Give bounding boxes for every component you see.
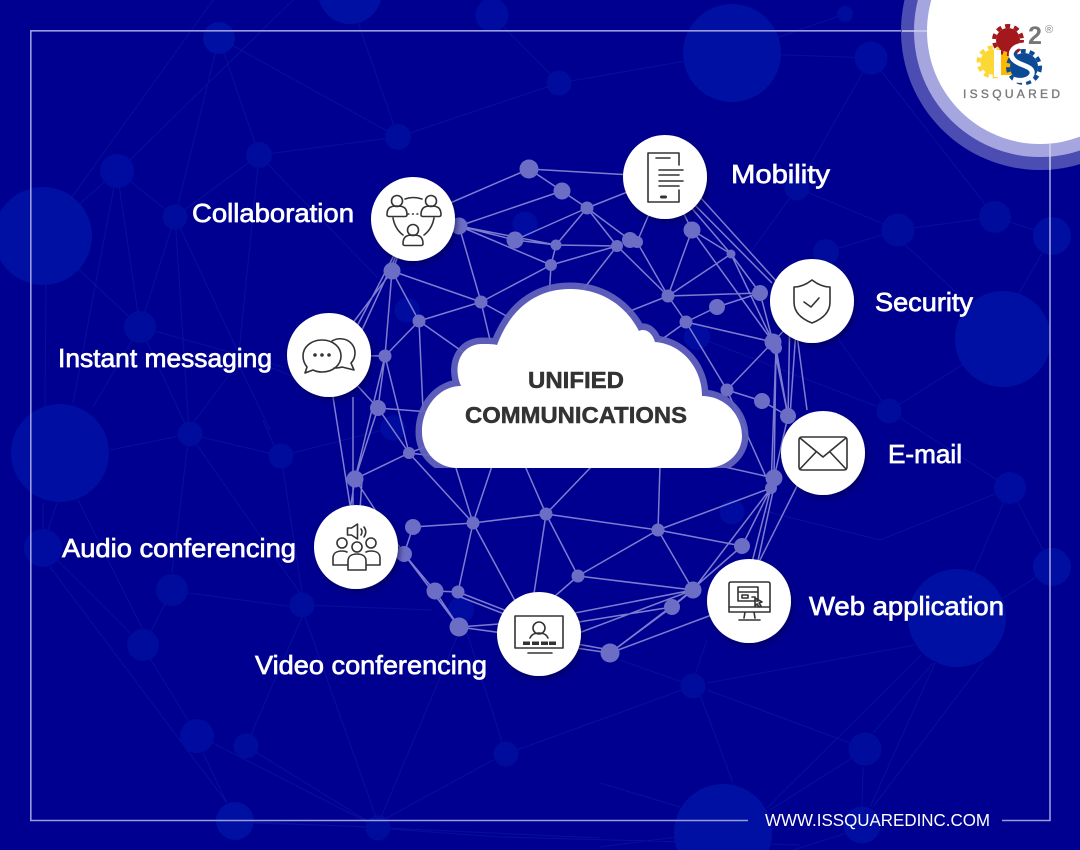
- logo badge: [901, 0, 1080, 170]
- item: instant messaging: [58, 313, 371, 397]
- item: security: Security: [875, 287, 973, 317]
- logo gears: ®: [1045, 24, 1053, 36]
- item: web application: Web application: [809, 591, 1004, 621]
- item: e-mail: [781, 411, 962, 495]
- item: audio conferencing: [62, 505, 398, 589]
- item: security: [770, 259, 973, 343]
- cloud title: COMMUNICATIONS: [465, 402, 687, 428]
- item: web application: [707, 559, 1004, 643]
- item: video conferencing: Video conferencing: [255, 650, 487, 680]
- item: audio conferencing: Audio conferencing: [62, 533, 296, 563]
- item: collaboration: Collaboration: [192, 198, 354, 228]
- cloud title: [465, 367, 687, 428]
- item: video conferencing: [255, 592, 581, 680]
- logo gears: [978, 22, 1053, 83]
- central network: [329, 160, 812, 662]
- cloud: unified communications: [422, 289, 742, 468]
- item: collaboration: [192, 177, 455, 261]
- item: mobility: [623, 135, 830, 219]
- item: e-mail: E-mail: [888, 439, 962, 469]
- logo gears: 2: [1028, 22, 1042, 50]
- item: instant messaging: Instant messaging: [58, 343, 272, 373]
- logo wordmark: ISSQUARED: [963, 87, 1060, 101]
- website url: WWW.ISSQUAREDINC.COM: [765, 810, 990, 830]
- item: mobility: Mobility: [731, 159, 830, 189]
- cloud title: UNIFIED: [528, 367, 624, 393]
